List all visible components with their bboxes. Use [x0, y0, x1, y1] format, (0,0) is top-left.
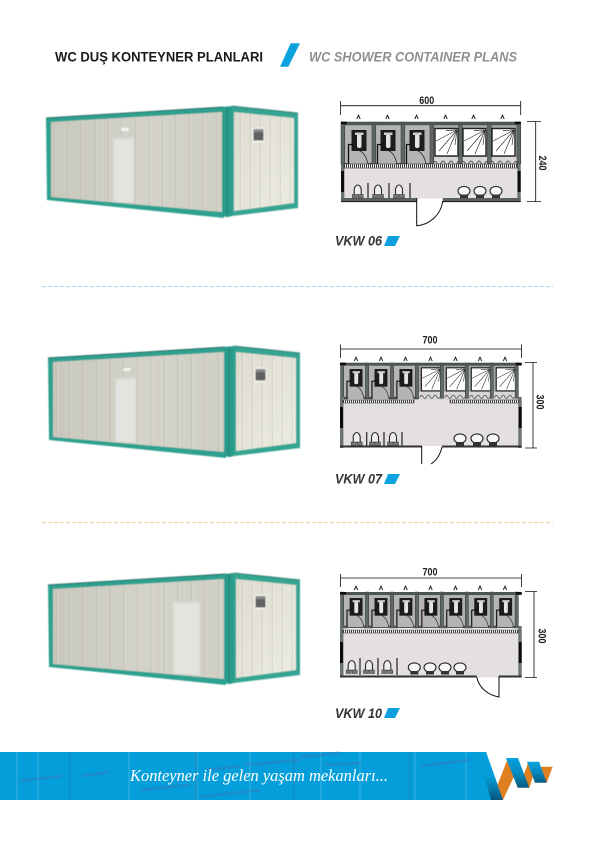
floor plan: VKW 07 — [340, 334, 546, 464]
heading — [55, 43, 517, 67]
container photo: VKW 07 — [48, 346, 300, 458]
entrance door — [477, 676, 499, 697]
toilets and sinks — [351, 432, 499, 446]
outer walls — [340, 592, 522, 678]
divider: orange dashed — [42, 522, 553, 524]
divider: blue dashed — [42, 286, 553, 288]
model label: VKW 10: VKW 10 — [335, 706, 382, 721]
slogan: Konteyner ile gelen yaşam mekanları... — [129, 766, 388, 785]
toilets and sinks — [352, 183, 502, 198]
room floor — [344, 168, 518, 198]
cells — [341, 122, 521, 166]
room floor — [343, 630, 518, 676]
width dimension 700: 700 — [422, 334, 438, 346]
toilets and sinks — [346, 658, 466, 675]
width dimension 700: 700 — [422, 566, 438, 578]
title: English: WC SHOWER CONTAINER PLANS — [309, 50, 517, 64]
room floor — [343, 398, 518, 446]
width dimension 700 — [340, 334, 522, 358]
container photo: VKW 10 — [48, 573, 300, 685]
floor plan: VKW 06 — [340, 95, 548, 226]
grating — [343, 400, 518, 403]
depth dimension 300: 300 — [536, 628, 548, 644]
depth dimension 300 — [525, 362, 546, 448]
model label: VKW 06: VKW 06 — [335, 234, 382, 248]
grating — [343, 628, 518, 633]
cells — [340, 592, 519, 628]
vents — [354, 586, 507, 590]
width dimension 600: 600 — [419, 95, 434, 107]
depth dimension 240: 240 — [536, 156, 548, 170]
vents — [357, 115, 504, 119]
title: Turkish: WC DUŞ KONTEYNER PLANLARI — [55, 50, 263, 64]
outer walls — [341, 122, 521, 202]
outer walls — [340, 363, 522, 448]
floor plan: VKW 10 — [340, 566, 548, 697]
width dimension 700 — [340, 566, 522, 587]
width dimension 600 — [340, 95, 521, 115]
entrance door — [422, 446, 442, 464]
grating — [344, 164, 518, 168]
depth dimension 300: 300 — [534, 394, 546, 410]
banner texture — [17, 752, 470, 800]
container photo: VKW 06 — [46, 106, 298, 218]
model label: VKW 07: VKW 07 — [335, 472, 383, 486]
icon: blue slash — [280, 43, 300, 67]
entrance door — [417, 198, 443, 226]
depth dimension 300 — [525, 592, 548, 678]
footer banner — [0, 752, 503, 800]
depth dimension 240 — [527, 122, 548, 202]
vents — [354, 357, 507, 361]
cells — [340, 363, 519, 399]
logo — [478, 752, 553, 800]
